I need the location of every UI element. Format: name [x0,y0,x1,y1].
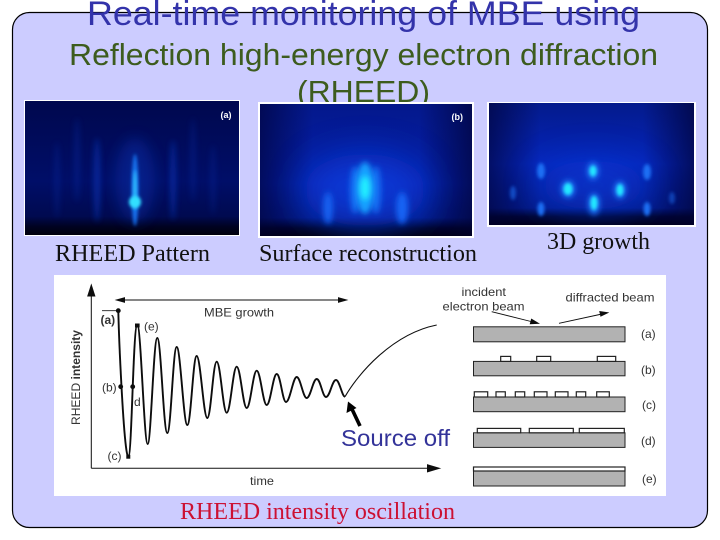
subtitle [69,37,658,109]
beam labels: incident [462,285,507,299]
MBE growth span arrow [116,298,346,302]
image: RHEED pattern (a) [24,100,240,236]
curve point labels: (c) [108,449,122,463]
y axis with arrow [88,285,95,468]
label: MBE growth: MBE growth [204,306,274,320]
substrate slabs [474,327,625,486]
curve point labels: (a) [100,313,115,327]
curve point labels [100,313,159,463]
incident beam arrow [492,312,538,324]
x axis with arrow [91,465,440,472]
stage labels [641,327,657,486]
image: surface reconstruction (b) [258,102,474,238]
curve point labels: (b) [102,380,117,394]
label: RHEED intensity: RHEED intensity [69,330,83,425]
oscillation curve [118,311,345,457]
subtitle: (RHEED) [297,74,430,109]
image: surface reconstruction (b): (b) [452,112,463,122]
label: Source off: Source off [341,425,451,451]
caption: RHEED intensity oscillation: RHEED intensity oscillation [180,499,455,525]
recovery curve after source off [345,325,437,397]
beam labels: diffracted beam [566,290,654,304]
islands on slabs [474,356,625,471]
image: 3D growth [487,102,696,227]
stage labels: (b) [641,363,656,377]
caption: 3D growth: 3D growth [547,229,650,255]
subtitle: Reflection high-energy electron diffraction [69,37,658,72]
stage labels: (a) [641,327,656,341]
diagram: surface growth stages [442,285,657,486]
beam labels [442,285,654,314]
curve point labels: d [134,395,141,409]
stage labels: (c) [642,398,656,412]
arrow: source off pointer [346,402,360,426]
caption: RHEED Pattern: RHEED Pattern [55,241,210,267]
label: time: time [250,474,274,488]
stage labels: (e) [642,472,657,486]
curve point labels: (e) [144,320,159,334]
diffracted beam arrow [559,312,608,323]
chart: RHEED intensity oscillation [69,285,440,488]
stage labels: (d) [641,434,656,448]
image: RHEED pattern (a): (a) [220,110,232,120]
marker points on curve [102,308,140,459]
beam labels: electron beam [442,300,524,314]
caption: Surface reconstruction: Surface reconstruction [259,241,477,267]
panel: chart and surface diagram background [54,275,666,496]
